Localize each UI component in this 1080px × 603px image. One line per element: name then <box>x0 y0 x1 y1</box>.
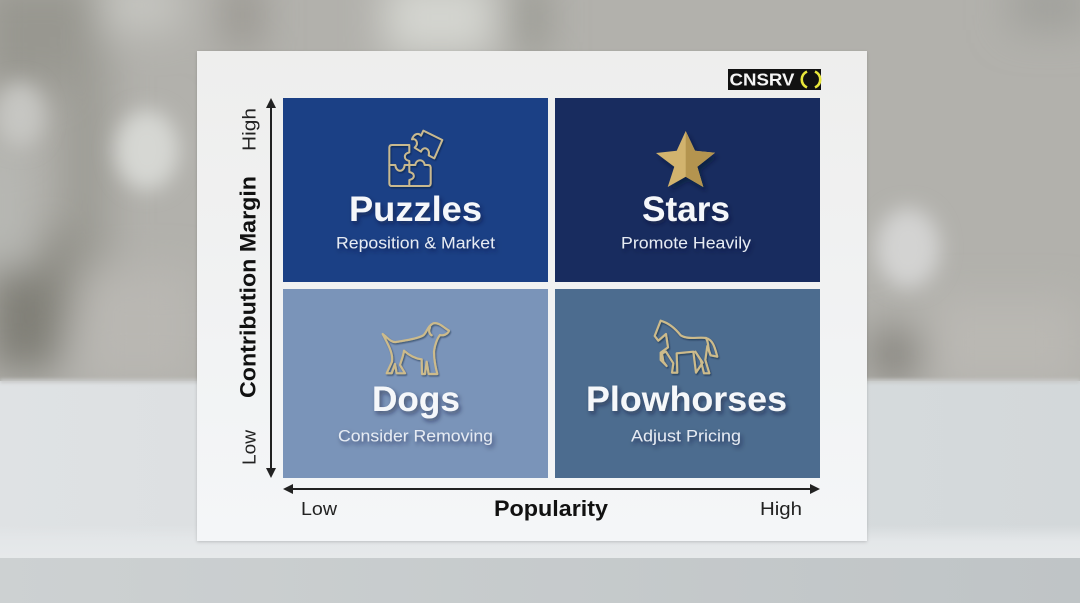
heading: Plowhorses: Plowhorses <box>586 380 787 419</box>
panel: Dogs <box>283 289 548 478</box>
panel: Plowhorses <box>555 289 820 478</box>
y axis label: Low: Low <box>240 429 260 465</box>
background: blurred wall <box>0 0 1080 385</box>
heading: Puzzles: Puzzles <box>349 190 482 229</box>
white card <box>197 51 867 541</box>
text: Reposition & Market: Reposition & Market <box>336 234 495 252</box>
y axis label: High: High <box>240 108 260 151</box>
background: table top <box>0 379 1080 603</box>
panel: Stars <box>555 98 820 282</box>
icon: gold star <box>656 131 715 187</box>
heading: Stars: Stars <box>642 190 730 229</box>
logo: CNSRV: CNSRV <box>730 70 795 90</box>
arrow: horizontal axis <box>283 484 820 494</box>
icon: dog <box>383 323 449 374</box>
icon: horse <box>655 321 717 373</box>
x axis title: Popularity: Popularity <box>494 496 609 521</box>
x axis label: Low: Low <box>301 499 338 519</box>
x axis label: High: High <box>760 499 802 519</box>
arrow: vertical axis <box>266 98 276 478</box>
icon: puzzle pieces <box>389 131 442 186</box>
panel: Puzzles <box>283 98 548 282</box>
logo: CNSRV <box>728 69 821 90</box>
text: Consider Removing: Consider Removing <box>338 428 493 446</box>
y axis title: Contribution Margin: Contribution Margin <box>236 176 260 398</box>
text: Adjust Pricing: Adjust Pricing <box>631 428 741 446</box>
text: Promote Heavily: Promote Heavily <box>621 234 752 252</box>
heading: Dogs: Dogs <box>372 380 460 419</box>
